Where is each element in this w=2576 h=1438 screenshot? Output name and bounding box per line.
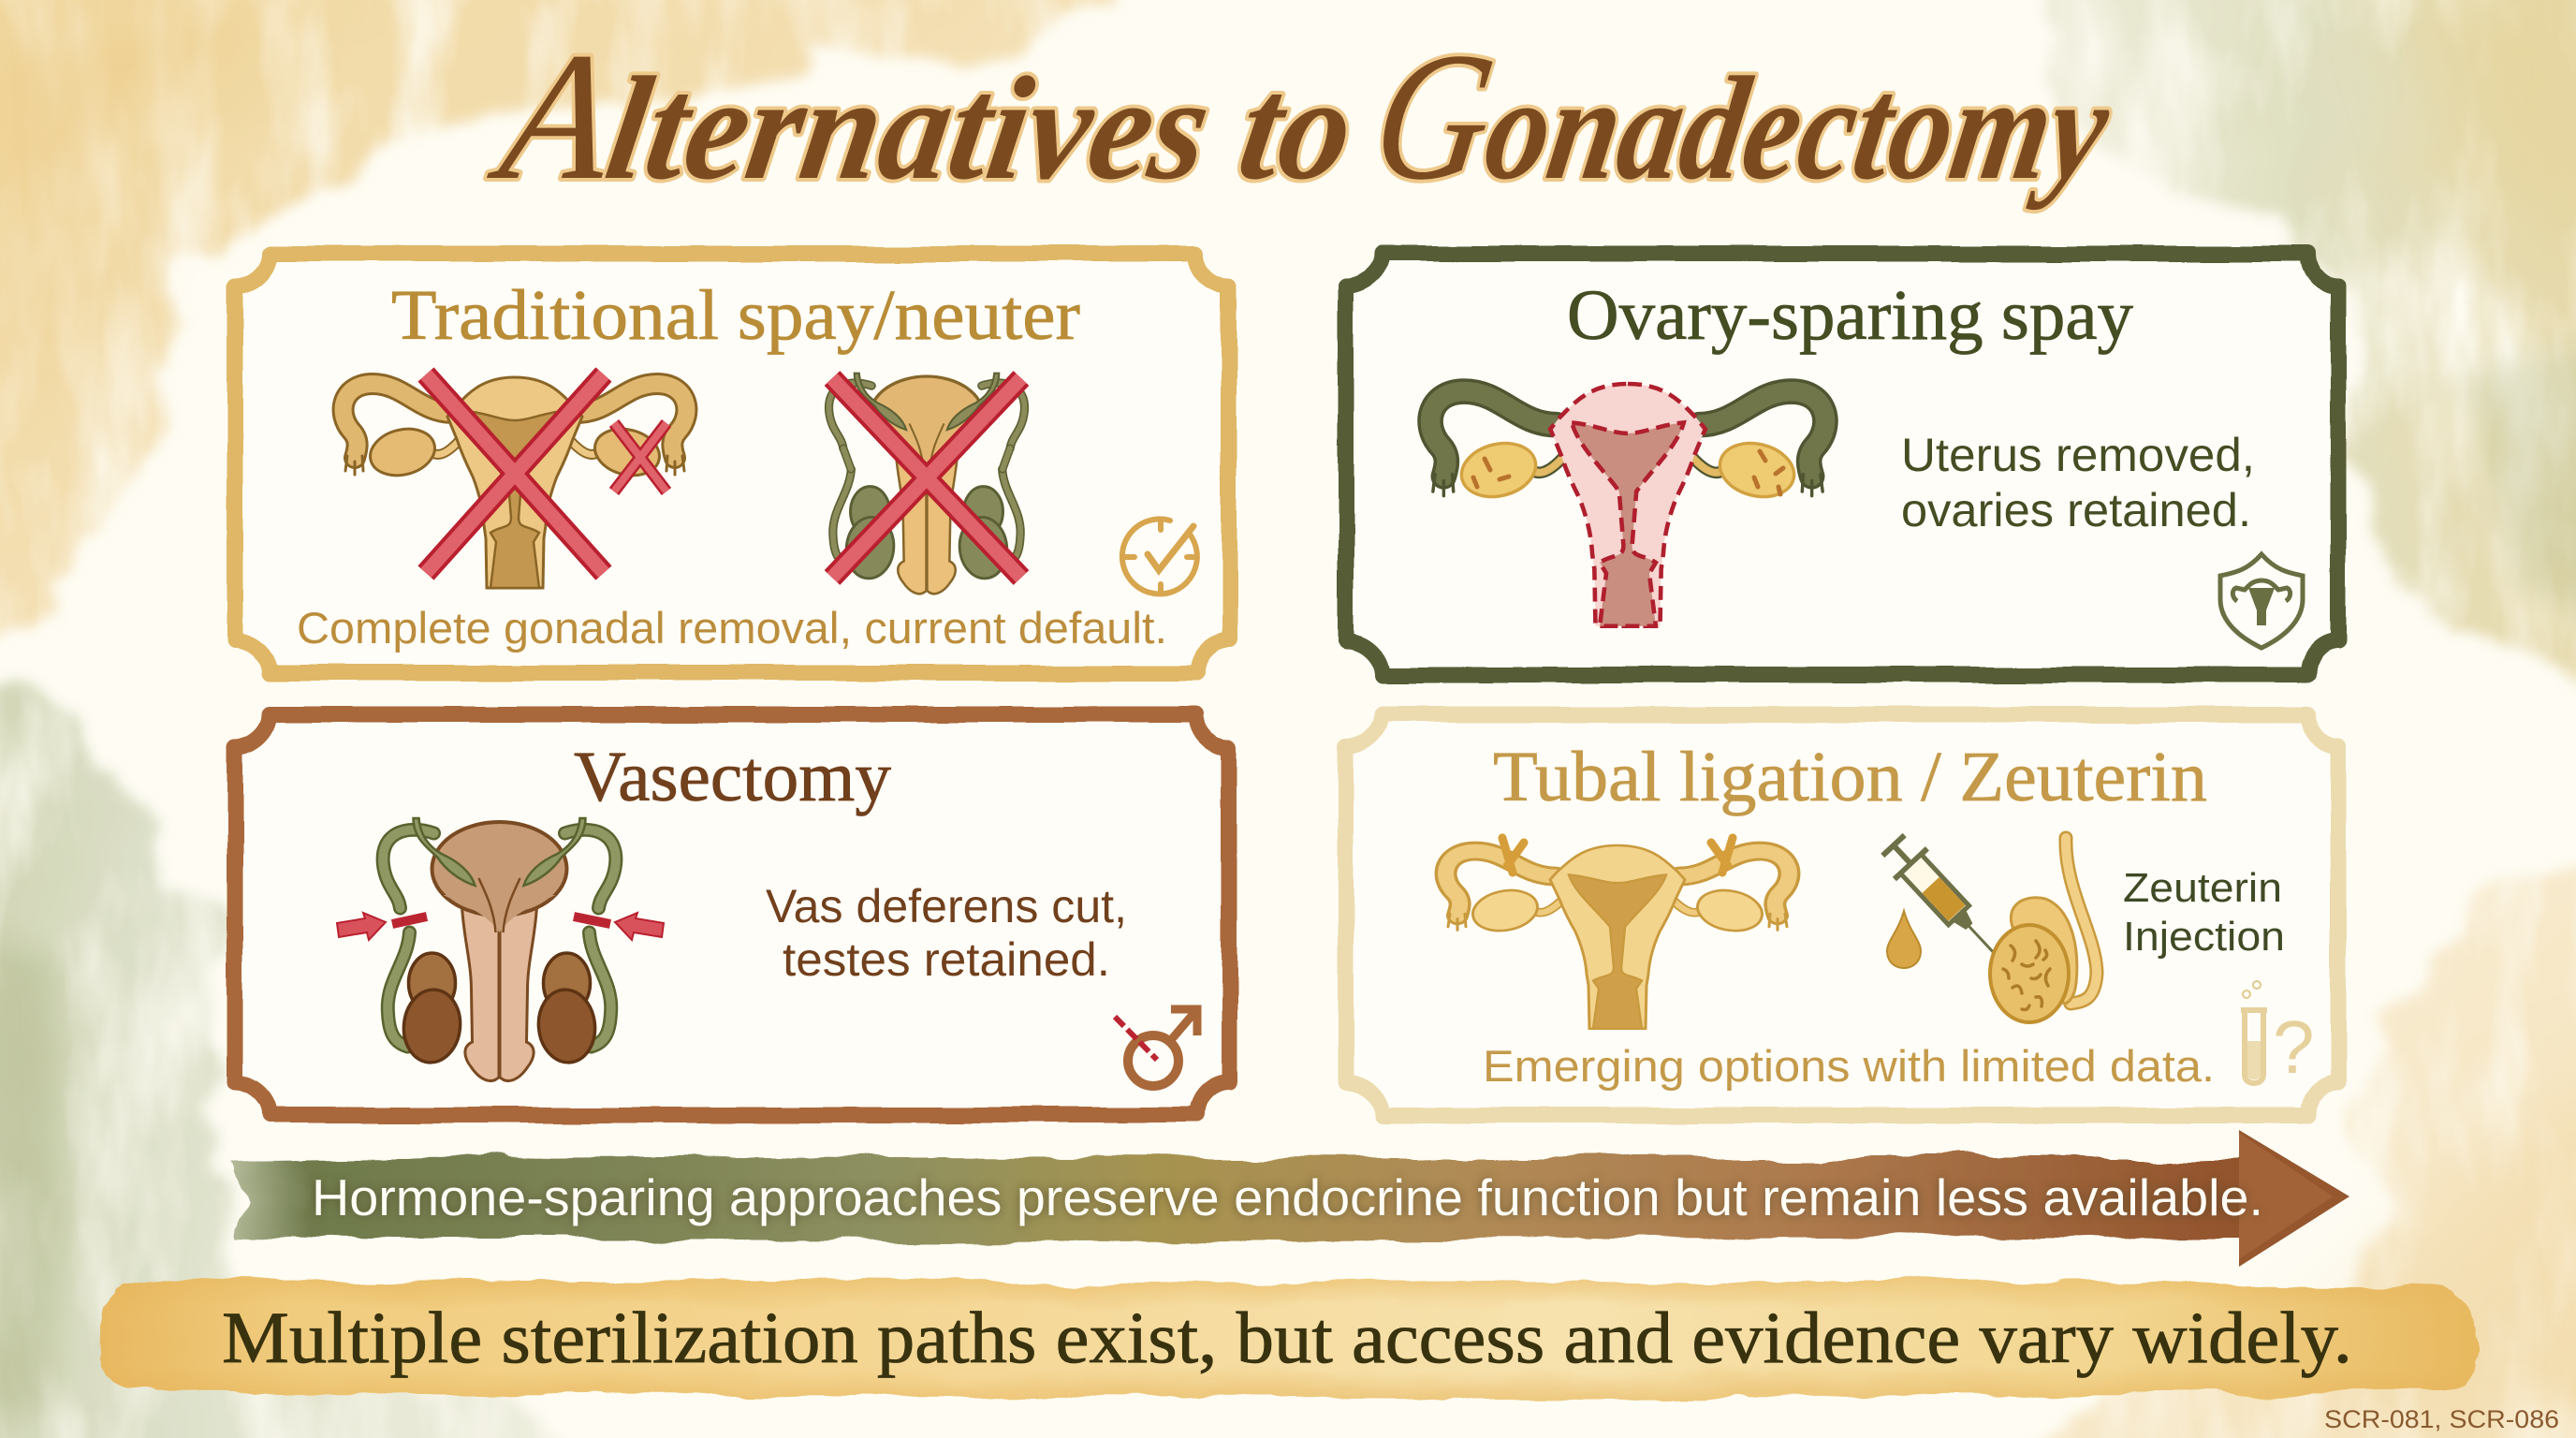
caption: Emerging options with limited data. [1483, 1041, 2215, 1091]
icon: testis with cord [1990, 838, 2097, 1022]
body text: Uterus removed, [1901, 429, 2255, 481]
heading: Ovary-sparing spay [1567, 276, 2133, 355]
icon: male anatomy with cut vas deferens [337, 818, 664, 1081]
icon: male anatomy crossed out [829, 374, 1024, 594]
source credit: SCR-081, SCR-086 [2324, 1405, 2559, 1433]
watercolor wash: bottom right [2004, 862, 2576, 1438]
icon: drop [1887, 911, 1921, 968]
icon: uterus crossed out [344, 374, 686, 588]
conclusion text: Multiple sterilization paths exist, but access and evidence vary widely. [222, 1297, 2352, 1378]
conclusion banner [99, 1277, 2479, 1399]
banner text: Hormone-sparing approaches preserve endocrine function but remain less available. [312, 1168, 2263, 1226]
title [480, 14, 2126, 218]
watercolor wash: top left [0, 0, 1114, 665]
icon: test tube and question mark: ? [2273, 1005, 2314, 1089]
icon: uterus with tied tubes [1446, 838, 1789, 1029]
body text: testes retained. [783, 933, 1110, 986]
panel: tubal ligation / zeuterin [1346, 714, 2338, 1115]
icon: syringe [1877, 830, 2021, 980]
arrow: right [615, 913, 664, 940]
title: Alternatives to [480, 14, 1369, 218]
label: zeuterin injection [2123, 865, 2285, 960]
icon: test tube and question mark [2241, 981, 2314, 1089]
body text [1901, 429, 2255, 536]
label: zeuterin injection: Zeuterin [2123, 865, 2282, 911]
caption: Complete gonadal removal, current default. [297, 603, 1167, 653]
body text: ovaries retained. [1901, 484, 2251, 536]
heading: Tubal ligation / Zeuterin [1493, 738, 2207, 816]
panel: ovary-sparing spay [1346, 254, 2338, 675]
body text: Vas deferens cut, [766, 880, 1127, 932]
arrow banner: Hormone-sparing approaches preserve endocrine function but remain less available. [312, 1168, 2263, 1226]
body text [766, 880, 1127, 986]
label: zeuterin injection: Injection [2123, 914, 2285, 960]
icon: clock with check [1122, 519, 1197, 594]
heading: Traditional spay/neuter [391, 276, 1080, 355]
title: Gonadectomy [1362, 14, 2126, 218]
watercolor wash: top right [2037, 0, 2576, 721]
icon: uterus removed outline with ovaries retained [1430, 384, 1825, 626]
panel: vasectomy [235, 714, 1229, 1115]
cut marks [392, 917, 610, 924]
arrow banner [230, 1130, 2349, 1267]
panel: traditional spay/neuter [235, 254, 1229, 673]
arrow: left [337, 913, 386, 940]
icon: shield with uterus [2220, 554, 2303, 648]
heading: Vasectomy [574, 738, 891, 816]
icon: male symbol with dashed cut [1115, 1009, 1197, 1086]
watercolor wash: bottom left [0, 669, 627, 1438]
